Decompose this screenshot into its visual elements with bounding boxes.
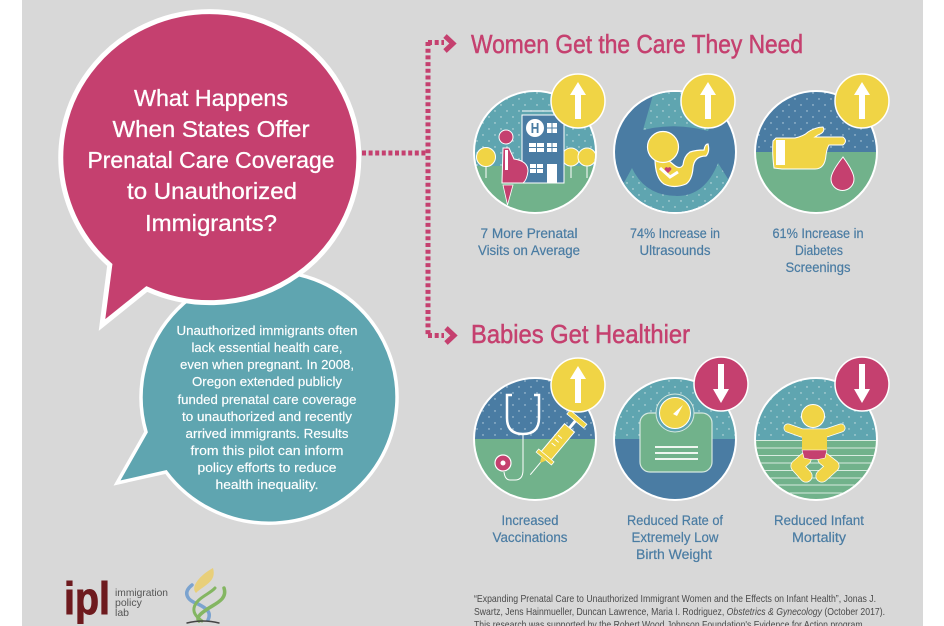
label: infant mortality <box>774 513 864 545</box>
teal bubble text: lack essential health care, <box>192 340 342 355</box>
teal bubble text: even when pregnant. In 2008, <box>180 357 354 372</box>
logo: immigration policy lab: policy <box>115 597 143 609</box>
heading: babies: Babies Get Healthier <box>471 319 690 349</box>
title: When States Offer <box>112 116 310 142</box>
icon: fetus ultrasound <box>613 90 737 214</box>
badge: up arrow 3 <box>835 74 889 128</box>
label: diabetes screenings: 61% Increase in <box>772 226 864 241</box>
teal bubble text: Unauthorized immigrants often <box>176 323 358 338</box>
icon: stethoscope and syringe <box>470 375 600 505</box>
logo: immigration policy lab <box>64 573 168 624</box>
teal bubble text: funded prenatal care coverage <box>178 392 356 407</box>
teal bubble text: Oregon extended publicly <box>192 374 343 389</box>
logo: immigration policy lab: ipl <box>64 573 110 624</box>
teal bubble text: from this pilot can inform <box>190 443 344 458</box>
label: diabetes screenings <box>772 226 864 275</box>
icon: infant scale <box>610 375 740 505</box>
teal bubble text: policy efforts to reduce <box>198 460 336 475</box>
teal bubble text: to unauthorized and recently <box>182 409 353 424</box>
teal bubble text: health inequality. <box>216 477 318 492</box>
icon: finger prick <box>750 88 880 218</box>
label: prenatal visits <box>478 226 580 258</box>
label: birth weight: Birth Weight <box>636 547 712 562</box>
pink speech bubble <box>61 12 359 325</box>
label: prenatal visits: 7 More Prenatal <box>480 226 578 241</box>
label: birth weight <box>627 513 723 562</box>
logo: immigration policy lab: lab <box>115 607 129 619</box>
dotted connector arrows <box>362 36 454 343</box>
logo: helix <box>187 568 225 623</box>
label: vaccinations <box>492 513 568 545</box>
label: ultrasounds <box>630 226 720 258</box>
label: vaccinations: Vaccinations <box>492 530 568 545</box>
label: vaccinations: Increased <box>502 513 558 528</box>
badge: up arrow 2 <box>681 74 735 128</box>
title: What Happens <box>134 85 288 111</box>
badge: up arrow 1 <box>551 74 605 128</box>
badge: down arrow 2 <box>835 357 889 411</box>
label: ultrasounds: 74% Increase in <box>630 226 720 241</box>
title <box>88 85 334 236</box>
label: infant mortality: Mortality <box>792 530 846 545</box>
citation <box>474 593 885 626</box>
logo: immigration policy lab: immigration <box>115 587 168 599</box>
badge: down arrow 1 <box>694 357 748 411</box>
title: Prenatal Care Coverage <box>88 147 334 173</box>
label: birth weight: Reduced Rate of <box>627 513 723 528</box>
teal bubble text: arrived immigrants. Results <box>186 426 349 441</box>
teal speech bubble <box>117 271 397 523</box>
title: Immigrants? <box>145 210 277 236</box>
label: diabetes screenings: Diabetes <box>795 243 843 258</box>
icon: hospital and pregnant woman <box>470 90 600 216</box>
label: birth weight: Extremely Low <box>632 530 719 545</box>
label: infant mortality: Reduced Infant <box>774 513 864 528</box>
label: prenatal visits: Visits on Average <box>478 243 580 258</box>
citation: Swartz, Jens Hainmueller, Duncan Lawrence, Maria I. Rodriguez, Obstetrics & Gynecology (October 2017). <box>474 606 885 618</box>
badge: up arrow 4 <box>551 358 605 412</box>
title: to Unauthorized <box>127 178 297 204</box>
label: diabetes screenings: Screenings <box>786 260 851 275</box>
icon: baby <box>750 375 880 506</box>
label: ultrasounds: Ultrasounds <box>640 243 711 258</box>
heading: women: Women Get the Care They Need <box>471 29 803 59</box>
teal bubble text <box>176 323 358 492</box>
